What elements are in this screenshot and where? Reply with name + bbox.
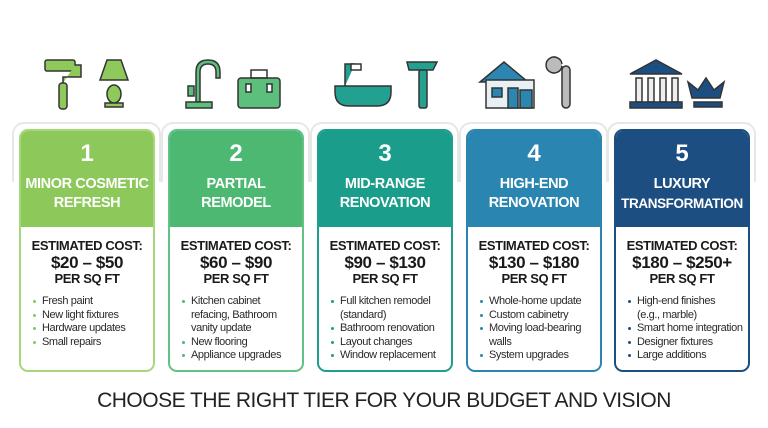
frame 4 [459,122,608,182]
card 5: Designer fixtures [637,336,713,348]
frame 3 [310,122,459,182]
frame 5 [607,122,756,182]
card 4: HIGH-END [500,176,568,192]
card 4: RENOVATION [489,195,579,211]
card 4: PER SQ FT [501,271,567,286]
icons: pillars and crown [629,59,726,109]
card 4: System upgrades [489,349,569,361]
footer title: CHOOSE THE RIGHT TIER FOR YOUR BUDGET AND VISION [97,389,671,412]
icons: roller and lamp [44,59,129,110]
card 3: (standard) [340,309,386,321]
card 5: ESTIMATED COST: [627,238,737,253]
card 1: Fresh paint [42,295,93,307]
card 1: MINOR COSMETIC [25,176,149,192]
card 5: (e.g., marble) [637,309,697,321]
card 4: Custom cabinetry [489,309,568,321]
card 2: Appliance upgrades [191,349,281,361]
card 3: Layout changes [340,336,412,348]
frame 2 [161,122,310,182]
card 3: Bathroom renovation [340,322,435,334]
card 4: 4 [527,140,541,167]
card 1: $20 – $50 [51,253,123,272]
card 1: New light fixtures [42,309,119,321]
card 2: refacing, Bathroom [191,309,277,321]
icons: bathtub and hammer [334,61,438,109]
card 3: ESTIMATED COST: [330,238,440,253]
card 5: Smart home integration [637,322,743,334]
icons: faucet and toolbox [185,59,281,109]
card 5: High-end finishes [637,295,715,307]
card 1: Small repairs [42,336,101,348]
card 2 [168,129,304,372]
card 3: PER SQ FT [352,271,418,286]
card 5: TRANSFORMATION [621,196,743,211]
card 4: Moving load-bearing [489,322,581,334]
card 3: $90 – $130 [344,253,426,272]
card 4: ESTIMATED COST: [479,238,589,253]
card 4: $130 – $180 [489,253,579,272]
card 2: PER SQ FT [203,271,269,286]
card 5: 5 [675,140,689,167]
card 5: $180 – $250+ [632,253,732,272]
card 1: ESTIMATED COST: [32,238,142,253]
card 5: PER SQ FT [649,271,715,286]
card 3: RENOVATION [340,195,430,211]
card 2: $60 – $90 [200,253,272,272]
card 5 [614,129,750,372]
card 2: New flooring [191,336,247,348]
card 5: Large additions [637,349,706,361]
card 5: LUXURY [654,176,710,192]
card 3: Window replacement [340,349,436,361]
frame 1 [12,122,161,182]
card 2: Kitchen cabinet [191,295,260,307]
card 3: Full kitchen remodel [340,295,430,307]
card 2: 2 [229,140,243,167]
card 1: Hardware updates [42,322,126,334]
icons: house and wrench [478,56,571,109]
card 1: PER SQ FT [54,271,120,286]
card 2: ESTIMATED COST: [181,238,291,253]
card 3 [317,129,453,372]
card 4: Whole-home update [489,295,581,307]
card 4: walls [489,336,511,348]
card 1 [19,129,155,372]
card 2: PARTIAL [207,176,265,192]
card 2: vanity update [191,322,251,334]
card 1: 1 [80,140,94,167]
card 3: MID-RANGE [345,176,425,192]
card 4 [466,129,602,372]
card 3: 3 [378,140,392,167]
card 2: REMODEL [201,195,271,211]
card 1: REFRESH [54,195,120,211]
